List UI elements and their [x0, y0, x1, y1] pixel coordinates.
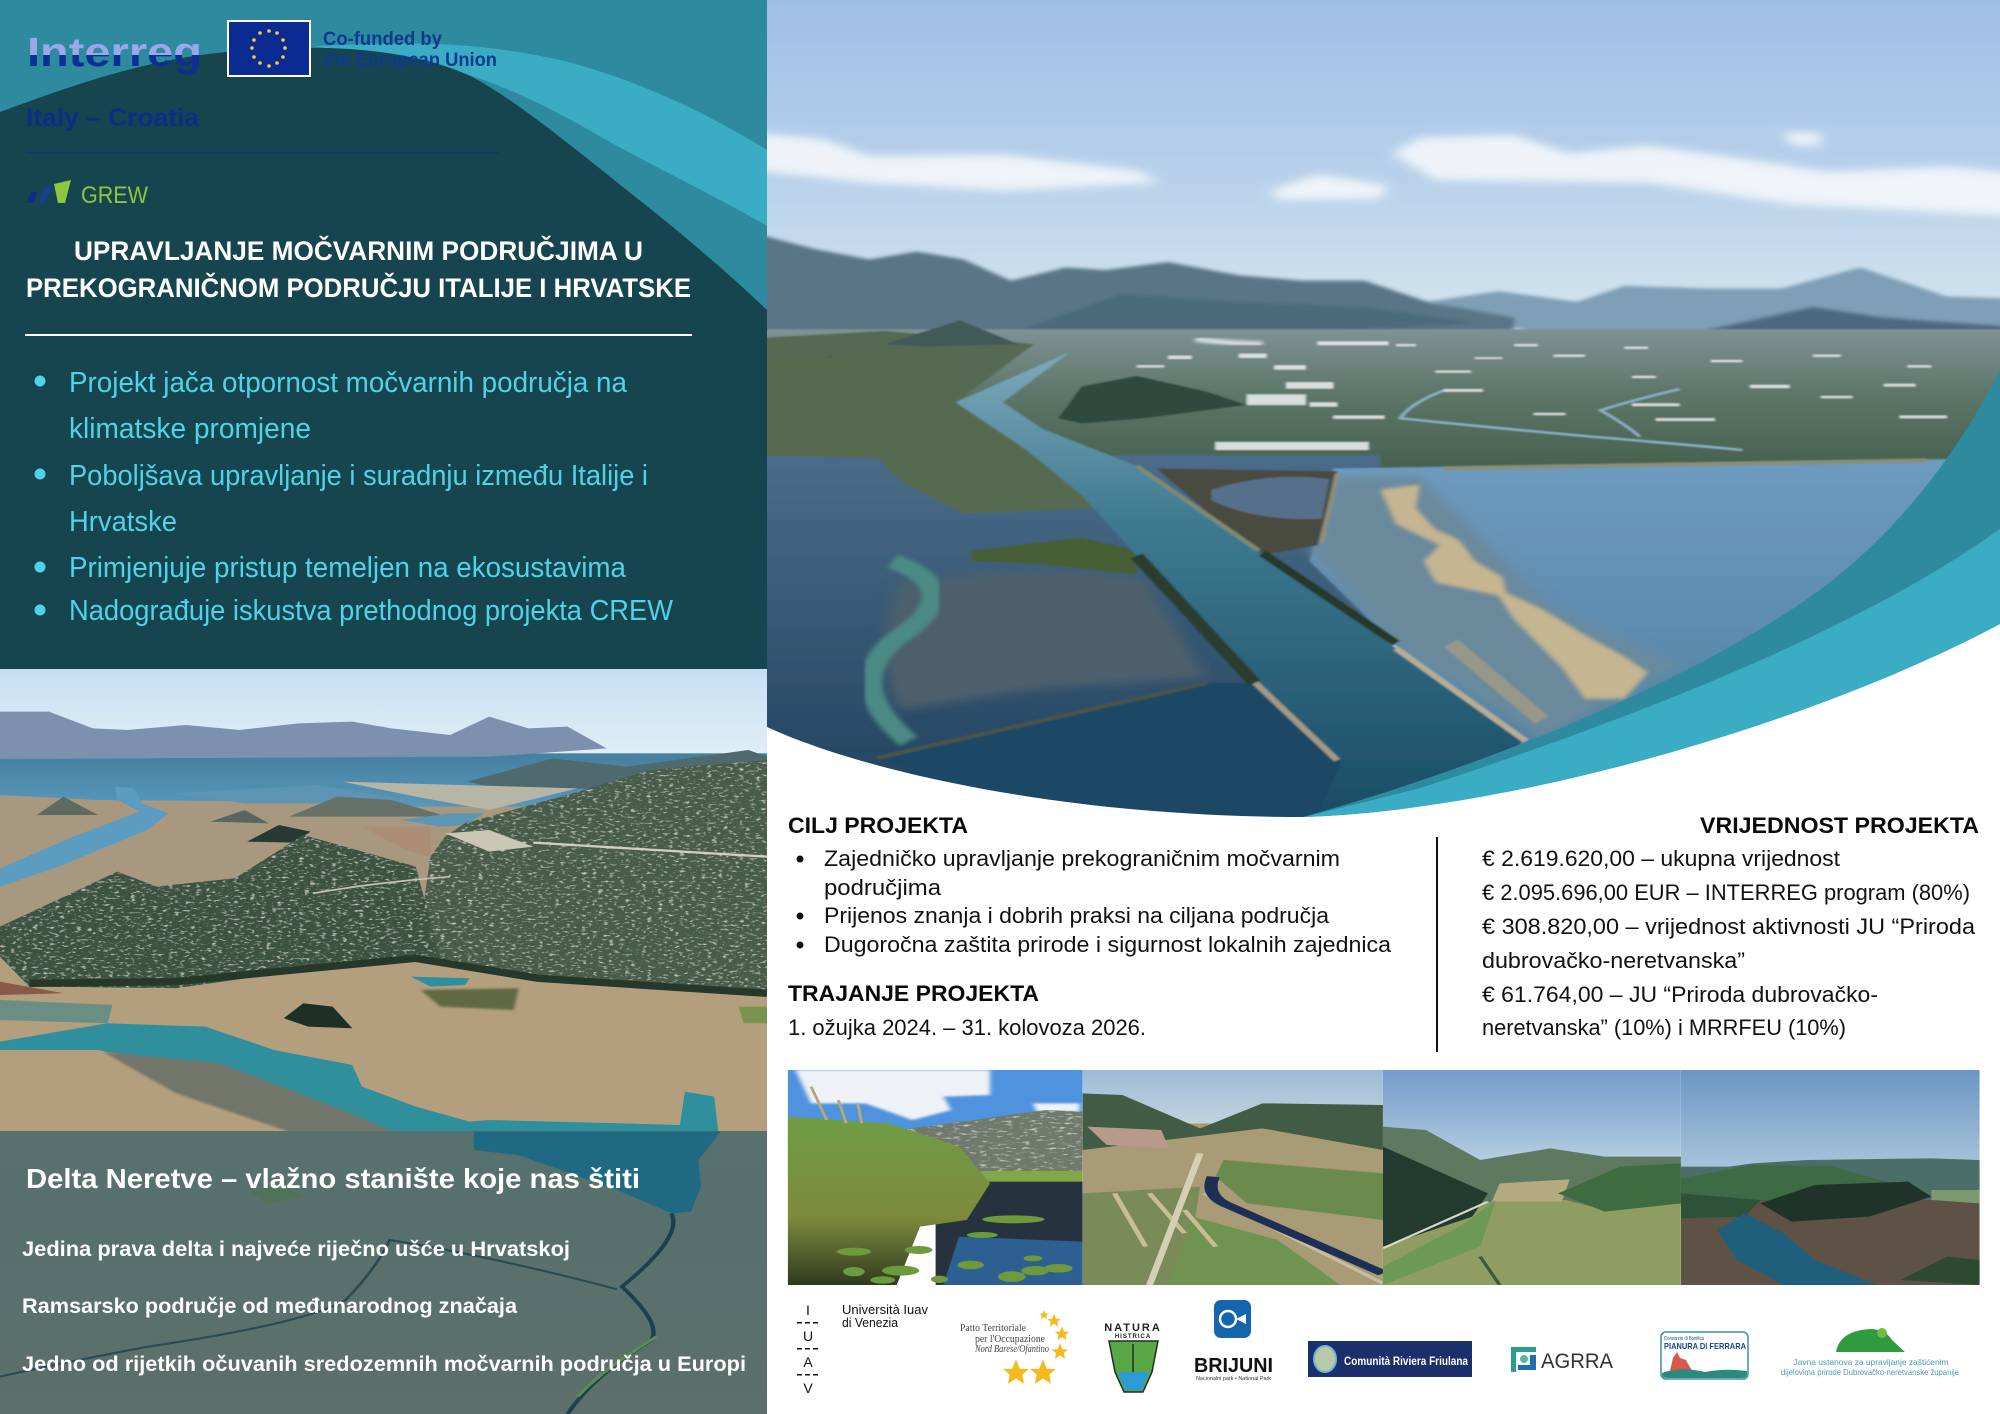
logo: Patto Territoriale — [960, 1310, 1069, 1384]
logo: Università Iuav di Venezia: V — [803, 1380, 813, 1396]
list: delta facts: Jedina prava delta i najveće riječno ušće u Hrvatskoj — [22, 1238, 570, 1261]
logo: Comunità Riviera Friulana — [1308, 1341, 1472, 1377]
photo: river town — [1681, 1070, 1980, 1285]
logo: Università Iuav di Venezia: di Venezia — [842, 1316, 898, 1330]
text: co-funded by: Co-funded by — [323, 29, 442, 50]
logo: Brijuni: Nacionalni park • National Park — [1196, 1376, 1271, 1382]
text block: project goal: područjima — [824, 875, 942, 900]
logo: AGRRA — [1511, 1347, 1613, 1373]
logo: Brijuni — [1194, 1300, 1273, 1382]
photo: reeds and water lilies — [788, 1070, 1083, 1285]
logo: Università Iuav di Venezia: I — [806, 1302, 810, 1318]
list: project goals: Hrvatske — [69, 506, 177, 538]
logo: Natura Histrica — [1104, 1322, 1162, 1392]
logo: Javna ustanova Dubrovačko-neretvanske županije: dijelovima prirode Dubrovačko-neretvanske županije — [1781, 1367, 1959, 1377]
photo: Neretva valley with hills — [0, 669, 767, 1140]
list: project goals: Poboljšava upravljanje i suradnju između Italije i — [69, 460, 648, 492]
list: delta facts: Jedno od rijetkih očuvanih sredozemnih močvarnih područja u Europi — [22, 1353, 746, 1376]
logo: Patto Territoriale: per l'Occupazione — [975, 1334, 1046, 1345]
list: project goals: Projekt jača otpornost močvarnih područja na — [69, 367, 628, 399]
logo: Patto Territoriale: Patto Territoriale — [960, 1323, 1027, 1334]
list: delta facts: Ramsarsko područje od međunarodnog značaja — [22, 1295, 517, 1318]
logo: Università Iuav di Venezia: U — [803, 1328, 813, 1344]
list: project goals: klimatske promjene — [69, 413, 311, 445]
logo: Pianura di Ferrara — [1661, 1332, 1748, 1379]
text block: project value: € 308.820,00 – vrijednost aktivnosti JU “Priroda — [1482, 914, 1976, 939]
logo: Javna ustanova Dubrovačko-neretvanske županije: Javna ustanova za upravljanje zaštićenim — [1794, 1357, 1948, 1367]
text block: project value — [1482, 813, 1979, 1040]
logo: Università Iuav di Venezia: A — [803, 1354, 813, 1370]
panel: project intro — [0, 0, 767, 670]
text block: project value: dubrovačko-neretvanska” — [1482, 948, 1745, 973]
heading: project title: UPRAVLJANJE MOČVARNIM PODRUČJIMA U — [74, 235, 643, 266]
text: co-funded by: the European Union — [323, 50, 497, 71]
text block: project goal: Zajedničko upravljanje prekograničnim močvarnim — [824, 846, 1340, 871]
photo: Neretva canal aerial view — [743, 0, 2000, 830]
text block: project duration: 1. ožujka 2024. – 31. kolovoza 2026. — [788, 1015, 1146, 1040]
text block: project goal: Dugoročna zaštita prirode i sigurnost lokalnih zajednica — [824, 932, 1392, 957]
logo: Pianura di Ferrara: Consorzio di Bonifica — [1664, 1336, 1705, 1342]
logo: Patto Territoriale: Nord Barese/Ofantino — [974, 1344, 1049, 1355]
photo: fields and canal — [1083, 1070, 1383, 1285]
logo: Pianura di Ferrara: PIANURA DI FERRARA — [1664, 1341, 1746, 1351]
text block: project duration: TRAJANJE PROJEKTA — [788, 981, 1039, 1006]
list: delta facts — [22, 1238, 746, 1376]
photo: valley meadow — [1383, 1070, 1681, 1285]
text block: project duration — [788, 981, 1146, 1040]
logo: AGRRA: AGRRA — [1541, 1350, 1613, 1373]
logo: GREW: GREW — [81, 182, 148, 209]
logo: Brijuni: BRIJUNI — [1194, 1355, 1273, 1377]
heading: project title: PREKOGRANIČNOM PODRUČJU ITALIJE I HRVATSKE — [26, 272, 691, 303]
text block: project value: € 61.764,00 – JU “Priroda dubrovačko- — [1482, 982, 1878, 1007]
swoosh: white curve with teal bands over main photo — [767, 370, 2000, 1060]
logo: Università Iuav di Venezia — [797, 1302, 929, 1396]
text block: project goal — [788, 813, 1392, 957]
logo: Natura Histrica: NATURA — [1104, 1322, 1162, 1334]
logo: Comunità Riviera Friulana: Comunità Riviera Friulana — [1344, 1354, 1468, 1368]
text block: project value: neretvanska” (10%) i MRRFEU (10%) — [1482, 1015, 1846, 1040]
logo: Interreg: Interreg — [27, 29, 202, 75]
panel: Delta Neretve overlay — [0, 1131, 767, 1414]
heading: project title — [26, 235, 691, 303]
text block: project goal: CILJ PROJEKTA — [788, 813, 968, 838]
text block: project goal: Prijenos znanja i dobrih praksi na ciljana područja — [824, 903, 1330, 928]
list: project goals: Primjenjuje pristup temeljen na ekosustavima — [69, 552, 627, 584]
logo: Natura Histrica: HISTRICA — [1115, 1334, 1151, 1340]
text: co-funded by — [323, 29, 497, 71]
photo strip: four wetland views — [788, 1070, 1980, 1285]
text block: project value: € 2.095.696,00 EUR – INTERREG program (80%) — [1482, 880, 1970, 905]
heading: Delta Neretve: Delta Neretve – vlažno stanište koje nas štiti — [26, 1163, 640, 1194]
list: project goals — [34, 367, 674, 627]
logo: Javna ustanova Dubrovačko-neretvanske županije — [1781, 1328, 1959, 1377]
logo: GREW — [27, 180, 148, 209]
logo: Università Iuav di Venezia: Università Iuav — [842, 1303, 929, 1317]
text block: project value: VRIJEDNOST PROJEKTA — [1700, 813, 1979, 838]
list: project goals: Nadograđuje iskustva prethodnog projekta CREW — [69, 595, 674, 627]
text block: project value: € 2.619.620,00 – ukupna vrijednost — [1482, 846, 1840, 871]
icon: EU flag — [228, 21, 310, 76]
text: Italy – Croatia: Italy – Croatia — [26, 104, 200, 132]
